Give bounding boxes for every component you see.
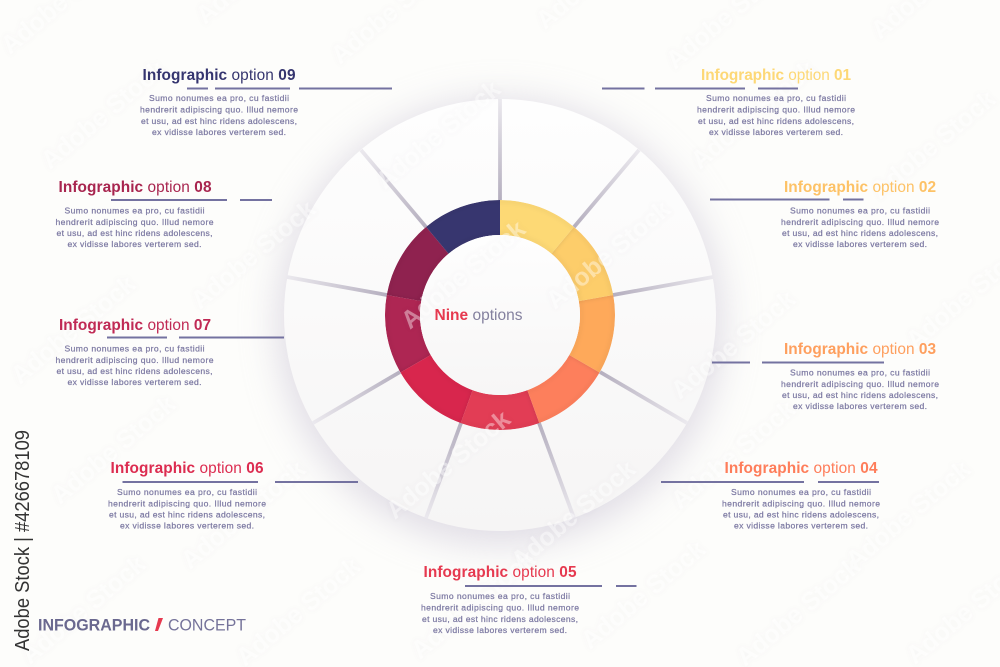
option 07 text: hendrerit adipiscing quo. Illud nemore bbox=[56, 355, 214, 365]
option 01 text: et usu, ad est hinc ridens adolescens, bbox=[698, 116, 854, 126]
option 01 text: hendrerit adipiscing quo. Illud nemore bbox=[697, 104, 855, 114]
option 09 text bbox=[140, 93, 298, 137]
watermark: diagonal stock marks: Adobe Stock bbox=[576, 535, 711, 655]
option 02 leader line bbox=[710, 198, 864, 200]
option 09 text: hendrerit adipiscing quo. Illud nemore bbox=[140, 104, 298, 114]
watermark: diagonal stock marks: Adobe Stock bbox=[6, 270, 141, 390]
option 03 leader line bbox=[712, 362, 884, 364]
option 06 heading: Infographic option 06 bbox=[110, 460, 264, 477]
option 07 text: et usu, ad est hinc ridens adolescens, bbox=[56, 366, 212, 376]
option 05 bbox=[421, 564, 636, 635]
option 07 bbox=[56, 317, 284, 387]
watermark: diagonal stock marks: Adobe Stock bbox=[841, 455, 976, 575]
option 08 leader line bbox=[111, 199, 272, 201]
option 08 text: Sumo nonumes ea pro, cu fastidii bbox=[64, 206, 205, 216]
option 07 heading: Infographic option 07 bbox=[59, 317, 211, 334]
option 01 bbox=[602, 67, 855, 137]
option 02 text: et usu, ad est hinc ridens adolescens, bbox=[782, 228, 938, 238]
spokes bbox=[287, 99, 713, 518]
option 04 text bbox=[722, 487, 880, 530]
option 03 text: et usu, ad est hinc ridens adolescens, bbox=[782, 390, 938, 400]
option 05 text: Sumo nonumes ea pro, cu fastidii bbox=[430, 591, 570, 601]
option 09 text: et usu, ad est hinc ridens adolescens, bbox=[141, 116, 297, 126]
option 09 leader line bbox=[187, 88, 392, 90]
option 02 bbox=[710, 179, 939, 249]
option 08 heading: Infographic option 08 bbox=[58, 179, 212, 196]
option 08 text: ex vidisse labores verterem sed. bbox=[68, 239, 202, 249]
option 06 text: ex vidisse labores verterem sed. bbox=[120, 520, 254, 530]
watermark: diagonal stock marks: Adobe Stock bbox=[866, 85, 1000, 205]
option 06 text bbox=[108, 487, 266, 530]
option 09 text: ex vidisse labores verterem sed. bbox=[152, 127, 286, 137]
option 09 text: Sumo nonumes ea pro, cu fastidii bbox=[149, 93, 289, 103]
option 05 leader line bbox=[465, 585, 636, 587]
option 05 text: hendrerit adipiscing quo. Illud nemore bbox=[421, 602, 579, 612]
option 06 leader line bbox=[122, 481, 358, 483]
option 01 text: Sumo nonumes ea pro, cu fastidii bbox=[706, 93, 846, 103]
option 04 heading: Infographic option 04 bbox=[724, 460, 878, 477]
watermark: diagonal stock marks: Adobe Stock bbox=[506, 455, 641, 575]
option 01 text: ex vidisse labores verterem sed. bbox=[709, 127, 843, 137]
option 05 text: et usu, ad est hinc ridens adolescens, bbox=[422, 614, 578, 624]
option 04 text: hendrerit adipiscing quo. Illud nemore bbox=[722, 498, 880, 508]
watermark: diagonal stock marks: Adobe Stock bbox=[666, 285, 801, 405]
option 05 heading: Infographic option 05 bbox=[424, 564, 577, 581]
pie chart: nine options bbox=[278, 99, 722, 544]
watermark: diagonal stock marks: Adobe Stock bbox=[381, 405, 516, 525]
centre circle bbox=[420, 235, 580, 395]
centre label: Nine options bbox=[434, 307, 523, 324]
option 02 text bbox=[781, 206, 939, 249]
option 02 text: Sumo nonumes ea pro, cu fastidii bbox=[790, 206, 930, 216]
footer concept label bbox=[38, 616, 246, 634]
watermark: diagonal stock marks: Adobe Stock bbox=[371, 75, 506, 195]
red slash bbox=[155, 618, 163, 631]
option 03 text: hendrerit adipiscing quo. Illud nemore bbox=[781, 379, 939, 389]
option 04 leader line bbox=[661, 481, 879, 483]
watermark: diagonal stock marks: Adobe Stock bbox=[186, 195, 321, 315]
option 02 heading: Infographic option 02 bbox=[784, 179, 936, 196]
option 06 bbox=[108, 460, 358, 530]
watermark: vertical stock id: Adobe Stock | #426678109 bbox=[12, 430, 34, 651]
option 03 text: Sumo nonumes ea pro, cu fastidii bbox=[790, 368, 930, 378]
option 04 text: ex vidisse labores verterem sed. bbox=[734, 520, 868, 530]
option 05 text: ex vidisse labores verterem sed. bbox=[433, 625, 567, 635]
option 08 text: et usu, ad est hinc ridens adolescens, bbox=[56, 228, 212, 238]
option 04 bbox=[661, 460, 880, 530]
option 06 text: Sumo nonumes ea pro, cu fastidii bbox=[117, 487, 257, 497]
watermark: diagonal stock marks: Adobe Stock bbox=[46, 390, 181, 510]
option 06 text: et usu, ad est hinc ridens adolescens, bbox=[109, 510, 265, 520]
option 07 leader line bbox=[107, 336, 284, 338]
option 06 text: hendrerit adipiscing quo. Illud nemore bbox=[108, 498, 266, 508]
colour ring bbox=[385, 200, 615, 430]
disc shadow bbox=[278, 100, 722, 544]
watermark: diagonal stock marks: Adobe Stock bbox=[686, 55, 821, 175]
outer disc bbox=[284, 99, 716, 531]
option 09 heading: Infographic option 09 bbox=[142, 67, 296, 84]
watermark: diagonal stock marks: Adobe Stock bbox=[396, 215, 531, 335]
watermark: diagonal stock marks: Adobe Stock bbox=[406, 545, 541, 665]
option 03 heading: Infographic option 03 bbox=[784, 341, 936, 358]
option 04 text: et usu, ad est hinc ridens adolescens, bbox=[723, 510, 879, 520]
option 01 text bbox=[697, 93, 855, 137]
option 07 text: ex vidisse labores verterem sed. bbox=[68, 377, 202, 387]
watermark: diagonal stock marks: Adobe Stock bbox=[36, 55, 171, 175]
option 07 text: Sumo nonumes ea pro, cu fastidii bbox=[64, 344, 205, 354]
watermark: diagonal stock marks: Adobe Stock bbox=[176, 455, 311, 575]
option 03 text: ex vidisse labores verterem sed. bbox=[793, 401, 927, 411]
option 08 text bbox=[56, 206, 214, 249]
option 02 text: hendrerit adipiscing quo. Illud nemore bbox=[781, 217, 939, 227]
option 07 text bbox=[56, 344, 214, 387]
option 04 text: Sumo nonumes ea pro, cu fastidii bbox=[731, 487, 871, 497]
option 08 bbox=[56, 179, 272, 249]
footer concept label: CONCEPT bbox=[168, 616, 246, 634]
watermark: diagonal stock marks: Adobe Stock bbox=[16, 550, 151, 667]
option 01 heading: Infographic option 01 bbox=[701, 67, 851, 84]
watermark: diagonal stock marks: Adobe Stock bbox=[541, 195, 676, 315]
option 09 bbox=[140, 67, 392, 137]
watermark: diagonal stock marks: Adobe Stock bbox=[666, 395, 801, 515]
option 01 leader line bbox=[602, 88, 798, 90]
option 05 text bbox=[421, 591, 579, 635]
option 08 text: hendrerit adipiscing quo. Illud nemore bbox=[56, 217, 214, 227]
option 02 text: ex vidisse labores verterem sed. bbox=[793, 239, 927, 249]
footer concept label: INFOGRAPHIC bbox=[38, 616, 150, 634]
option 03 bbox=[712, 341, 939, 411]
option 03 text bbox=[781, 368, 939, 411]
